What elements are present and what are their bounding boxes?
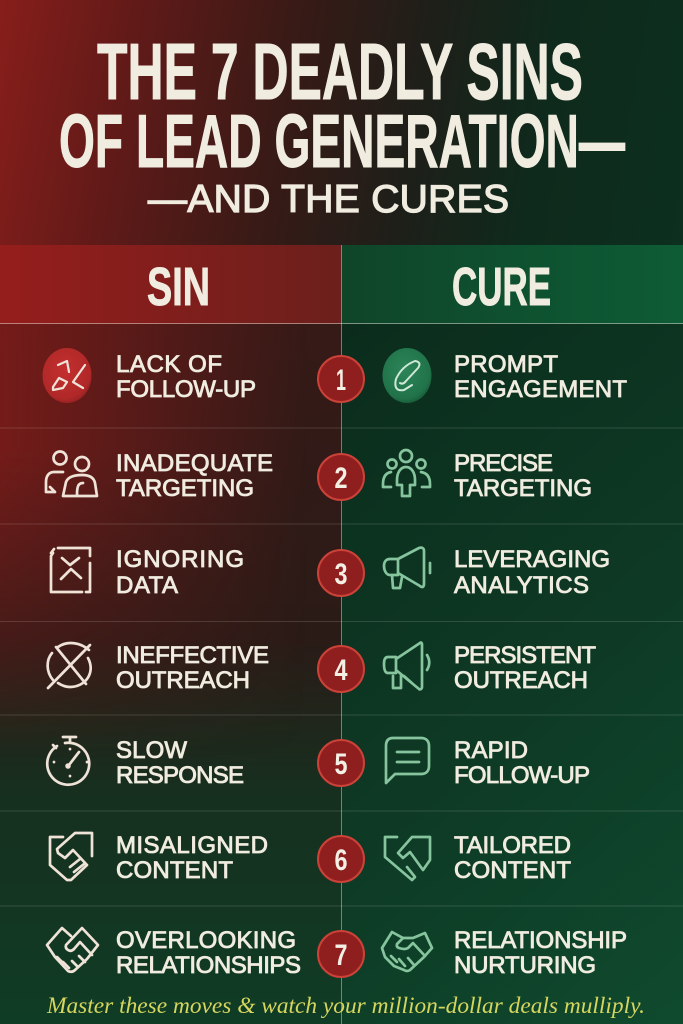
- icon: broken link badge: [42, 348, 92, 403]
- row 7 sin: overlooking relationships: RELATIONSHIPS: [116, 952, 301, 979]
- row 5 sin: slow response: RESPONSE: [116, 762, 244, 789]
- row 5 cure: rapid follow-up: FOLLOW-UP: [454, 762, 590, 789]
- row 1 cure: prompt engagement: ENGAGEMENT: [454, 376, 627, 403]
- row 2 cure: precise targeting: TARGETING: [454, 475, 592, 502]
- row 1 sin: lack of follow-up: FOLLOW-UP: [116, 376, 256, 403]
- row 3 cure: leveraging analytics: ANALYTICS: [454, 572, 589, 599]
- row 4 sin: ineffective outreach: OUTREACH: [116, 667, 250, 694]
- icon: megaphone: [384, 548, 430, 588]
- row 6 sin: misaligned content: [50, 832, 268, 884]
- icon: handshake shield: [50, 833, 92, 880]
- icon: two people: [46, 452, 97, 496]
- icon: handshake shield: [385, 837, 430, 880]
- row 7 number: 7: [334, 939, 348, 972]
- panel: title background: [0, 0, 683, 245]
- row 5 sin: slow response: SLOW: [116, 737, 187, 764]
- row 4 number: 4: [334, 654, 348, 687]
- row 4 number: [318, 646, 364, 692]
- row 6 number: 6: [334, 844, 348, 877]
- row 6 number: [318, 836, 364, 882]
- row 7 cure: relationship nurturing: [382, 927, 627, 979]
- icon: speech bubble: [386, 738, 429, 783]
- row 6 cure: tailored content: TAILORED: [454, 832, 571, 859]
- row 2 cure: precise targeting: [383, 450, 592, 502]
- row 3 cure: leveraging analytics: LEVERAGING: [454, 546, 610, 573]
- row 6 cure: tailored content: CONTENT: [454, 857, 571, 884]
- row 1 number: [318, 356, 364, 402]
- row 3 number: [318, 550, 364, 596]
- row 2 number: 2: [334, 462, 348, 495]
- row 5 number: 5: [334, 748, 348, 781]
- row 2 cure: precise targeting: PRECISE: [454, 450, 553, 477]
- row 3 sin: ignoring data: IGNORING: [116, 546, 244, 573]
- icon: handshake: [47, 928, 98, 972]
- row 6 cure: tailored content: [385, 832, 571, 884]
- heading: sin: SIN: [147, 257, 210, 317]
- title: [59, 27, 625, 221]
- row 3 number: 3: [334, 558, 348, 591]
- row 6 sin: misaligned content: CONTENT: [116, 857, 233, 884]
- icon: broken data frame: [51, 548, 90, 592]
- icon: crossed circle: [48, 643, 91, 688]
- icon: megaphone with sound: [384, 643, 429, 689]
- icon: stopwatch: [47, 737, 89, 785]
- icon: group of people: [383, 450, 430, 496]
- title: —AND THE CURES: [148, 178, 509, 221]
- panel: sin header background: [0, 245, 341, 324]
- icon: paperclip badge: [382, 348, 432, 403]
- row 6 sin: misaligned content: MISALIGNED: [116, 832, 268, 859]
- row 7 sin: overlooking relationships: [47, 927, 301, 979]
- panel: cure header background: [341, 245, 683, 324]
- row 7 cure: relationship nurturing: NURTURING: [454, 952, 596, 979]
- icon: handshake: [382, 932, 432, 971]
- row 2 number: [318, 454, 364, 500]
- row 1 sin: lack of follow-up: [42, 348, 256, 403]
- row 2 sin: inadequate targeting: [46, 450, 273, 502]
- row 4 sin: ineffective outreach: INEFFECTIVE: [116, 642, 269, 669]
- row 4 cure: persistent outreach: PERSISTENT: [454, 642, 596, 669]
- row 4 cure: persistent outreach: [384, 642, 596, 694]
- row 7 cure: relationship nurturing: RELATIONSHIP: [454, 927, 627, 954]
- row 5 sin: slow response: [47, 737, 244, 789]
- row 5 cure: rapid follow-up: RAPID: [454, 737, 528, 764]
- row 5 number: [318, 740, 364, 786]
- row 4 cure: persistent outreach: OUTREACH: [454, 667, 588, 694]
- footer tagline: Master these moves & watch your million-dollar deals mulliply.: [46, 993, 645, 1018]
- panel: sin column background: [0, 324, 341, 1024]
- row 2 sin: inadequate targeting: TARGETING: [116, 475, 254, 502]
- row 2 sin: inadequate targeting: INADEQUATE: [116, 450, 273, 477]
- row 1 cure: prompt engagement: PROMPT: [454, 351, 558, 378]
- row 1 sin: lack of follow-up: LACK OF: [116, 351, 222, 378]
- row 3 sin: ignoring data: [51, 546, 244, 599]
- panel: cure column background: [341, 324, 683, 1024]
- row 3 sin: ignoring data: DATA: [116, 572, 178, 599]
- heading: cure: CURE: [452, 257, 551, 317]
- row 4 sin: ineffective outreach: [48, 642, 269, 694]
- row 7 number: [318, 931, 364, 977]
- row 1 number: 1: [336, 364, 346, 397]
- row 1 cure: prompt engagement: [382, 348, 627, 403]
- row 5 cure: rapid follow-up: [386, 737, 590, 789]
- row 7 sin: overlooking relationships: OVERLOOKING: [116, 927, 296, 954]
- row 3 cure: leveraging analytics: [384, 546, 610, 599]
